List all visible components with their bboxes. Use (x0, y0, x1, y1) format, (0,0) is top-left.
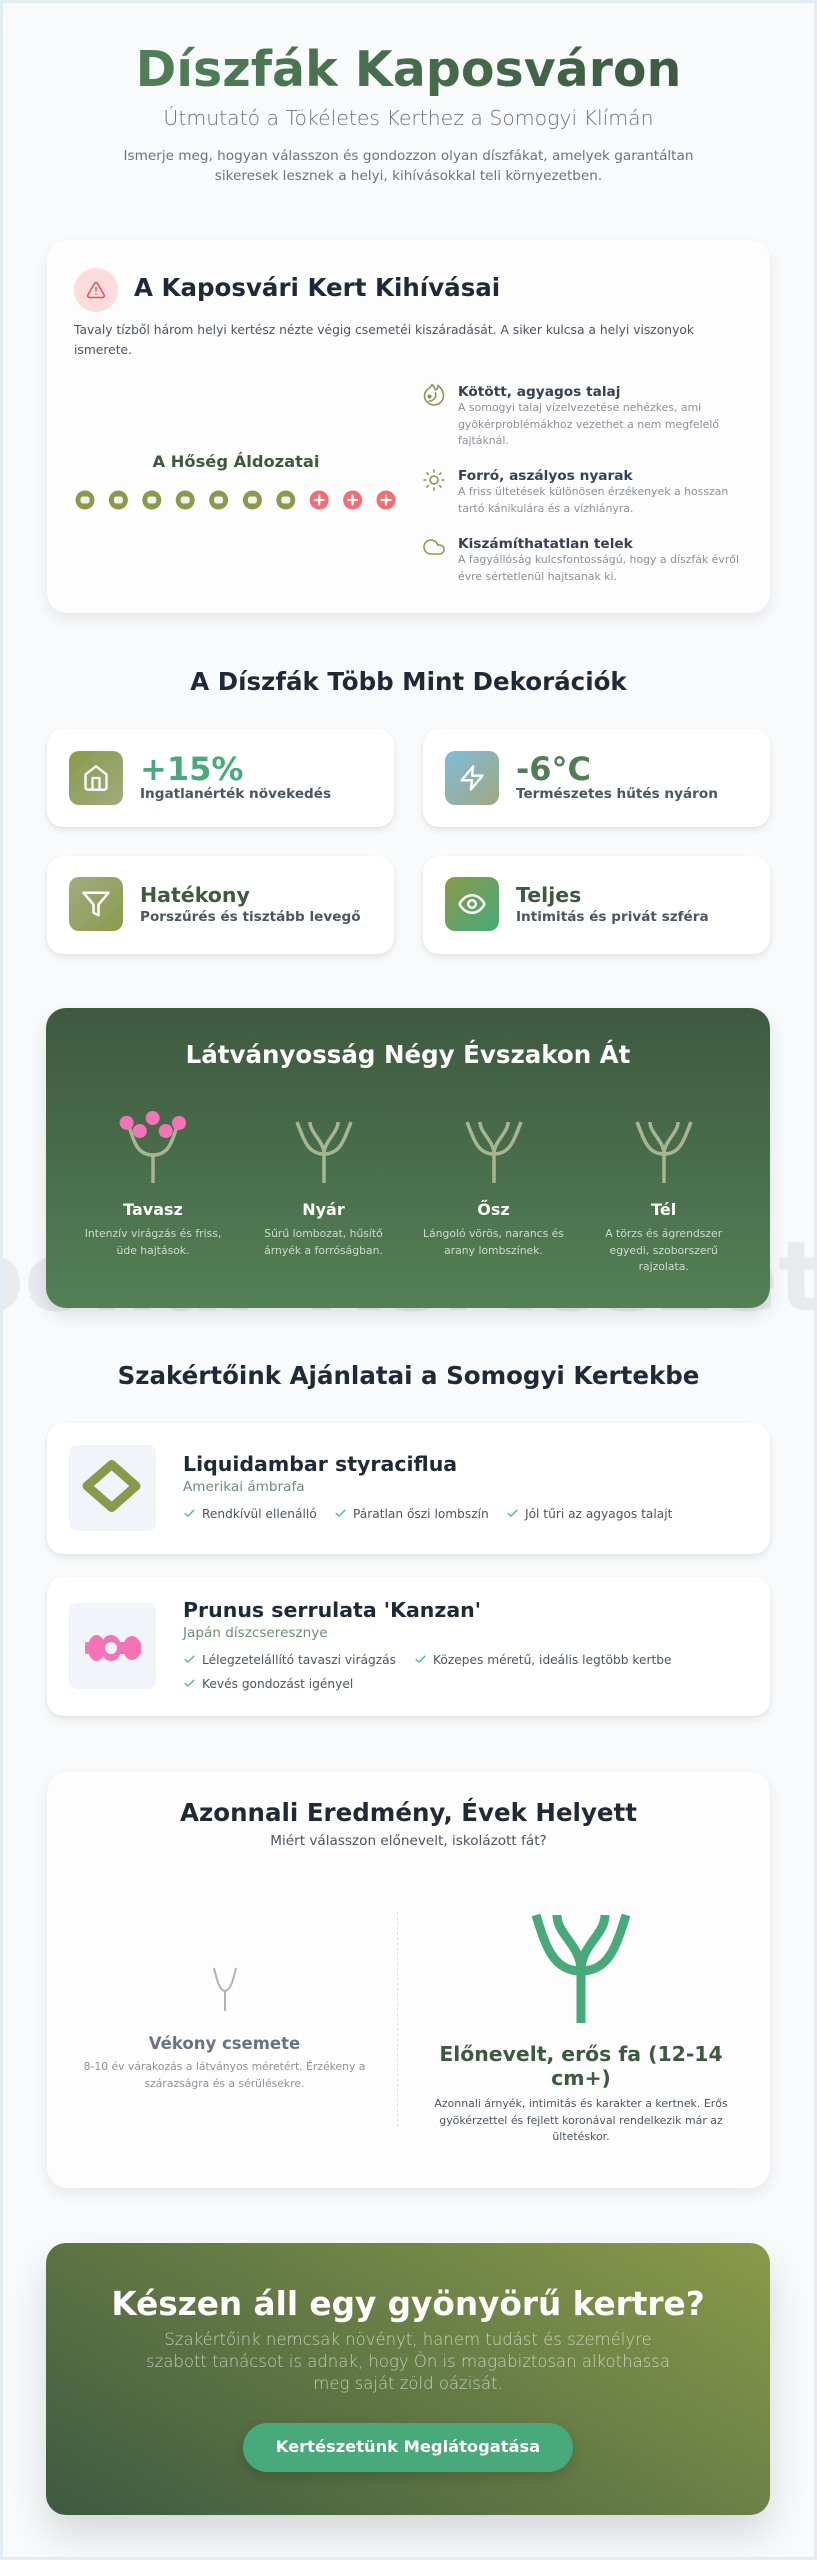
value: Teljes (516, 883, 581, 907)
chart title: A Hőség Áldozatai (152, 452, 319, 471)
column text: gyökérzettel és fejlett koronával rendelkezik már az (439, 2114, 723, 2127)
column title: Előnevelt, erős fa (12-14 (439, 2042, 723, 2066)
item text: fajtáknál. (458, 434, 509, 447)
feature list (184, 1653, 672, 1691)
icon: soil blob (424, 384, 444, 406)
icon: filter (69, 877, 123, 931)
item text (458, 401, 719, 447)
intro text (74, 323, 694, 356)
icon: tree (635, 1122, 693, 1183)
season text: A törzs és ágrendszer (605, 1227, 722, 1240)
icon: lightning (445, 751, 499, 805)
button: Kertészetünk Meglátogatása (276, 2437, 540, 2456)
icon: cloud (423, 539, 445, 555)
icon: sun (423, 469, 445, 491)
icon: tree (295, 1122, 353, 1183)
column text: Azonnali árnyék, intimitás és karakter a kertnek. Erős (434, 2097, 728, 2110)
value: -6°C (516, 750, 591, 788)
value: +15% (140, 750, 243, 788)
item text: évre sértetlenül hajtsanak ki. (458, 570, 617, 583)
item text: tartó kánikulára és a vízhiányra. (458, 502, 633, 515)
text: meg saját zöld oázisát. (313, 2374, 503, 2393)
season name: Ősz (477, 1200, 510, 1219)
stat card: privacy (423, 856, 770, 954)
season text (423, 1227, 564, 1257)
season text: Intenzív virágzás és friss, (85, 1227, 221, 1240)
column title (439, 2042, 723, 2090)
column: pre-grown tree (434, 1914, 728, 2143)
season text (85, 1227, 221, 1257)
text (146, 2330, 670, 2393)
column text: ültetéskor. (552, 2130, 610, 2143)
column text: 8-10 év várakozás a látványos méretért. Érzékeny a (84, 2060, 365, 2073)
icon: strong tree (532, 1914, 630, 2023)
stat card: cooling (423, 729, 770, 827)
column title: cm+) (551, 2066, 611, 2090)
text: szabott tanácsot is adnak, hogy Ön is magabiztosan alkothassa (146, 2352, 670, 2371)
season text: üde hajtások. (116, 1244, 190, 1257)
panel: call to action (46, 2243, 770, 2515)
common name: Japán díszcseresznye (183, 1625, 328, 1641)
season text (605, 1227, 722, 1273)
season text: Lángoló vörös, narancs és (423, 1227, 564, 1240)
item title: Forró, aszályos nyarak (458, 468, 633, 484)
stat card: property value (47, 729, 394, 827)
item text: A friss ültetések különösen érzékenyek a hosszan (458, 485, 728, 498)
season: spring (85, 1111, 221, 1257)
panel: comparison (47, 1772, 770, 2188)
tree name: Liquidambar styraciflua (183, 1452, 457, 1476)
intro text: Ismerje meg, hogyan válasszon és gondozzon olyan díszfákat, amelyek garantáltan (124, 148, 693, 164)
label: Intimitás és privát szféra (516, 909, 709, 925)
feature list: Lélegzetelállító tavaszi virágzás (202, 1653, 396, 1667)
icon: thin tree (213, 1968, 237, 2011)
panel: challenges (47, 240, 770, 613)
icon: blossom (69, 1603, 156, 1689)
column text: szárazságra és a sérülésekre. (145, 2077, 304, 2090)
item text (458, 553, 739, 583)
label: Ingatlanérték növekedés (140, 786, 331, 802)
feature list: Páratlan őszi lombszín (353, 1507, 489, 1521)
column: thin sapling (84, 1968, 365, 2090)
icon: diamond leaf (69, 1445, 156, 1531)
feature list (184, 1507, 672, 1521)
divider (396, 1912, 398, 2127)
feature list: Közepes méretű, ideális legtöbb kertbe (433, 1653, 672, 1667)
heading: Látványosság Négy Évszakon Át (186, 1040, 630, 1069)
stat card: filtering (47, 856, 394, 954)
intro text: ismerete. (74, 342, 132, 356)
column text (84, 2060, 365, 2090)
item: clay soil (424, 384, 719, 447)
season text: rajzolata. (639, 1260, 689, 1273)
item text (458, 485, 728, 515)
title: Díszfák Kaposváron (136, 41, 681, 98)
tree card: Prunus (47, 1577, 770, 1716)
season name: Nyár (302, 1200, 345, 1219)
feature list: Rendkívül ellenálló (202, 1507, 317, 1521)
button (243, 2423, 573, 2472)
column text (434, 2097, 728, 2143)
season text: arany lombszínek. (444, 1244, 543, 1257)
value: Hatékony (140, 883, 250, 907)
item text: gyökérproblémákhoz vezethet a nem megfelelő (458, 418, 719, 431)
icon row: 7 surviving, 3 lost (76, 490, 396, 510)
subheading: Miért válasszon előnevelt, iskolázott fát? (270, 1833, 547, 1849)
intro text: Tavaly tízből három helyi kertész nézte végig csemetéi kiszáradását. A siker kulcsa a helyi viszonyok (74, 323, 694, 337)
item text: A somogyi talaj vízelvezetése nehézkes, ami (458, 401, 701, 414)
season name: Tél (651, 1200, 676, 1219)
tree card: Liquidambar (47, 1423, 770, 1554)
icon: tree (465, 1122, 523, 1183)
item title: Kiszámíthatatlan telek (458, 536, 633, 552)
heading: Azonnali Eredmény, Évek Helyett (180, 1798, 637, 1827)
subtitle: Útmutató a Tökéletes Kerthez a Somogyi Klímán (163, 106, 654, 130)
header (124, 41, 693, 184)
label: Természetes hűtés nyáron (516, 786, 718, 802)
feature list: Kevés gondozást igényel (202, 1677, 353, 1691)
column title: Vékony csemete (149, 2034, 300, 2053)
intro text (124, 148, 693, 184)
heading: expert picks: Szakértőink Ajánlatai a Somogyi Kertekbe (118, 1361, 699, 1390)
heading: Készen áll egy gyönyörű kertre? (111, 2285, 705, 2323)
heading: A Kaposvári Kert Kihívásai (134, 273, 500, 302)
intro text: sikeresek lesznek a helyi, kihívásokkal teli környezetben. (215, 168, 602, 184)
season text (264, 1227, 383, 1257)
season name: Tavasz (123, 1200, 183, 1219)
icon: blossoming tree (120, 1111, 186, 1183)
item text: A fagyállóság kulcsfontosságú, hogy a díszfák évről (458, 553, 739, 566)
heading: benefits: A Díszfák Több Mint Dekorációk (190, 667, 627, 696)
icon: house (69, 751, 123, 805)
season text: Sűrű lombozat, hűsítő (264, 1227, 383, 1240)
season text: árnyék a forróságban. (264, 1244, 383, 1257)
icon: warning (74, 268, 118, 312)
tree name: Prunus serrulata 'Kanzan' (183, 1598, 481, 1622)
season: winter (605, 1122, 722, 1273)
item: hot summers (423, 468, 728, 515)
feature list: Jól tűri az agyagos talajt (525, 1507, 672, 1521)
common name: Amerikai ámbrafa (183, 1479, 305, 1495)
item: unpredictable winters (423, 536, 739, 583)
label: Porszűrés és tisztább levegő (140, 909, 361, 925)
season: autumn (423, 1122, 564, 1257)
text: Szakértőink nemcsak növényt, hanem tudást és személyre (164, 2330, 652, 2349)
item title: Kötött, agyagos talaj (458, 384, 620, 400)
chart: heat casualties (76, 452, 396, 510)
season: summer (264, 1122, 383, 1257)
panel: four seasons (46, 1008, 770, 1308)
season text: egyedi, szoborszerű (610, 1244, 718, 1257)
icon: eye (445, 877, 499, 931)
